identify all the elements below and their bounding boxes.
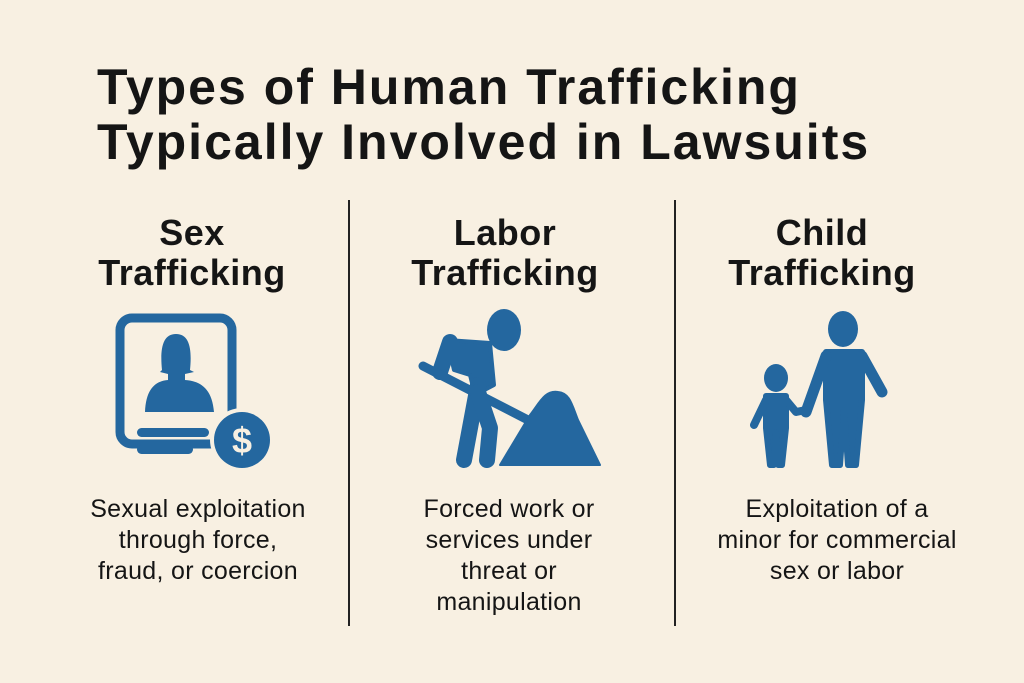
text: child trafficking description: Exploitation of a (746, 495, 928, 523)
heading: sex trafficking: Sex (159, 212, 225, 253)
heading: child trafficking (728, 212, 916, 293)
icon: document with coin (120, 318, 274, 472)
title: Typically Involved in Lawsuits (97, 114, 870, 170)
text: child trafficking description: minor for commercial (717, 526, 957, 554)
heading: child trafficking: Child (776, 212, 868, 253)
heading: labor trafficking: Trafficking (411, 252, 599, 293)
text: labor trafficking description (424, 495, 594, 616)
heading: child trafficking: Trafficking (728, 252, 916, 293)
heading: labor trafficking (411, 212, 599, 293)
text: sex trafficking description: fraud, or coercion (98, 557, 298, 585)
text: labor trafficking description: threat or (461, 557, 557, 585)
text: sex trafficking description: through force, (119, 526, 277, 554)
title (97, 59, 870, 170)
text: sex trafficking description: Sexual exploitation (90, 495, 306, 523)
text: labor trafficking description: services under (426, 526, 592, 554)
icon: adult and child (754, 311, 882, 465)
icon: laborer with shovel (423, 309, 600, 465)
text: labor trafficking description: manipulation (436, 588, 582, 616)
text: sex trafficking description (90, 495, 306, 585)
text: child trafficking description: sex or labor (770, 557, 904, 585)
text: labor trafficking description: Forced work or (424, 495, 594, 523)
icon: document with coin: $ (232, 420, 252, 461)
heading: sex trafficking (98, 212, 286, 293)
title: Types of Human Trafficking (97, 59, 801, 115)
heading: labor trafficking: Labor (454, 212, 556, 253)
heading: sex trafficking: Trafficking (98, 252, 286, 293)
text: child trafficking description (717, 495, 957, 585)
